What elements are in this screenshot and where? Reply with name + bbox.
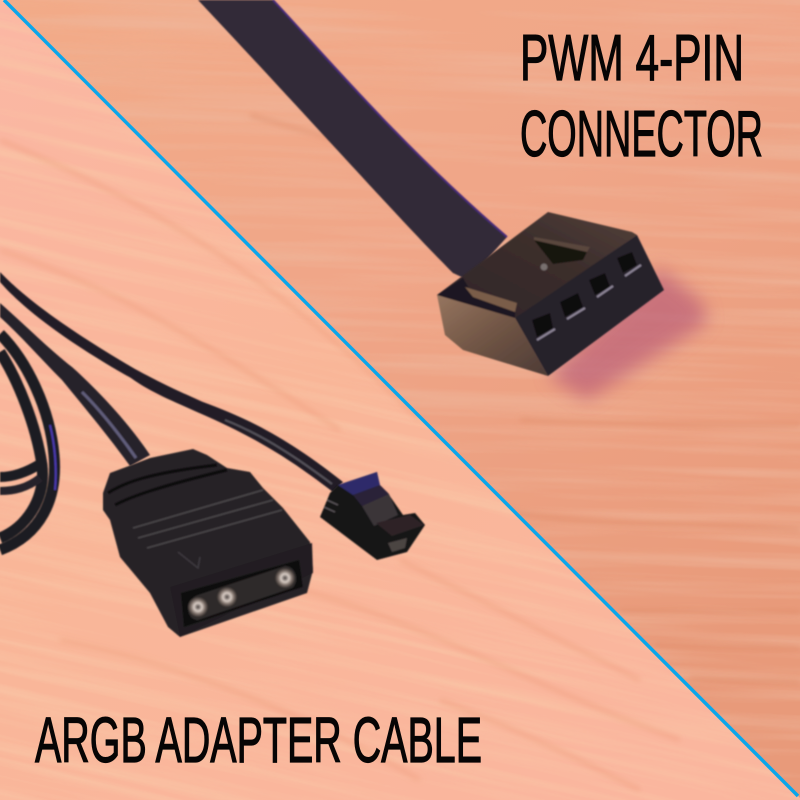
- icon: ARGB 3-pin connector: [103, 449, 313, 637]
- icon: small JST connector: [320, 472, 425, 560]
- pins: [188, 597, 208, 617]
- title: PWM 4-pin connector: [520, 21, 763, 170]
- alignment arrow mark: [178, 552, 200, 568]
- top face: [437, 212, 637, 318]
- title: ARGB adapter cable: ARGB ADAPTER CABLE: [35, 704, 482, 776]
- glossy front lip: [465, 287, 517, 312]
- connector face bezel: [170, 543, 313, 637]
- pin island: [188, 566, 296, 620]
- pin holes: [532, 313, 553, 337]
- thin signal cable: [0, 272, 343, 492]
- flat ribbon cable: [198, 0, 507, 280]
- thick cable into connector: [0, 303, 150, 466]
- connector shadow: [548, 268, 707, 400]
- side face: [437, 295, 548, 376]
- icon: ARGB cables: [0, 272, 343, 550]
- 4-pin fan connector: [437, 212, 664, 376]
- latch: [534, 240, 587, 264]
- looped cables: [0, 334, 56, 550]
- front face: [515, 235, 664, 376]
